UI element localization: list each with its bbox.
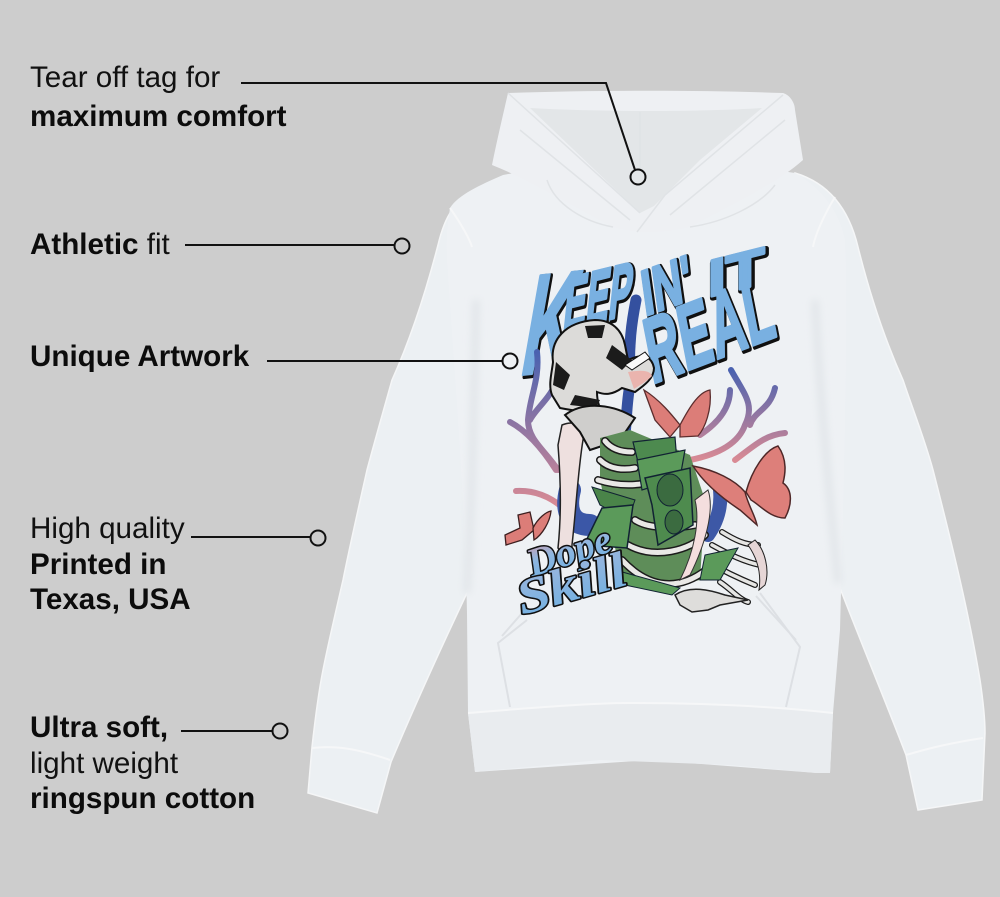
artwork: title lettering: IT [708,236,764,308]
artwork: title lettering: K [514,243,592,408]
leader line: high quality [191,536,310,538]
artwork: butterfly right [693,446,790,525]
artwork: butterfly small [505,511,551,545]
text: Texas, USA: Texas, USA [30,583,191,616]
leader line: unique artwork [267,360,502,362]
artwork: dollar bills [584,437,738,595]
callout: unique artwork [30,340,518,373]
hoodie: sleeve fold shadows [467,300,838,593]
hoodie: waistband [468,703,833,773]
text: printed in: Printed in [30,548,166,581]
hoodie: fleece inside hood [530,108,762,213]
artwork: title lettering: K [513,241,590,406]
leader line: athletic fit [185,244,394,246]
hoodie: sleeve and hem seams [312,197,983,760]
artwork: title lettering: REAL [636,256,782,404]
artwork: title lettering: IT [710,238,766,310]
artwork: script lettering [510,516,633,626]
hoodie: body [447,150,846,773]
leader line: tear off tag [241,83,635,170]
artwork: title lettering: IN' [639,244,697,332]
artwork: skull [550,320,654,415]
marker: ultra soft [272,724,288,738]
artwork: script lettering: Skill [510,541,633,626]
artwork: shoulder [565,406,635,450]
marker: high quality [310,530,326,546]
callout: ringspun cotton [30,711,288,815]
hoodie: hood fold and neck seams [508,93,785,232]
text: unique artwork: Unique Artwork [30,340,250,373]
callout: tear off tag [30,61,646,184]
callout: printed in Texas [30,512,326,616]
artwork [505,236,790,626]
artwork: branches [510,300,785,535]
hoodie: hood [492,91,803,232]
hoodie: right sleeve [780,173,985,810]
marker: athletic fit [394,238,410,254]
artwork: butterfly top [644,390,710,437]
artwork: arm bone [558,423,583,551]
marker: unique artwork [502,354,518,368]
callout: athletic fit [30,228,410,261]
text: maximum comfort: maximum comfort [30,100,287,133]
marker: tear off tag [630,170,646,184]
artwork: title lettering: EEP [560,245,637,347]
leader line: ultra soft [181,730,272,732]
artwork: script lettering: Dope [520,516,617,586]
artwork: hand bones [675,589,748,612]
artwork: title lettering: IN' [637,242,696,330]
artwork: rib cage [598,430,767,602]
hoodie: left sleeve [308,190,500,813]
hoodie: kangaroo pocket [498,593,800,707]
artwork: title lettering [513,236,783,408]
text: ultra soft: Ultra soft, [30,711,168,744]
text: high quality: High quality [30,512,185,545]
hoodie [308,91,985,813]
text: tear off tag: Tear off tag for [30,61,220,94]
text: athletic fit: Athletic fit [30,228,170,261]
text: light weight: light weight [30,747,178,780]
artwork: title lettering: REAL [638,257,783,405]
text: ringspun cotton: ringspun cotton [30,782,255,815]
artwork: title lettering: EEP [562,247,639,349]
